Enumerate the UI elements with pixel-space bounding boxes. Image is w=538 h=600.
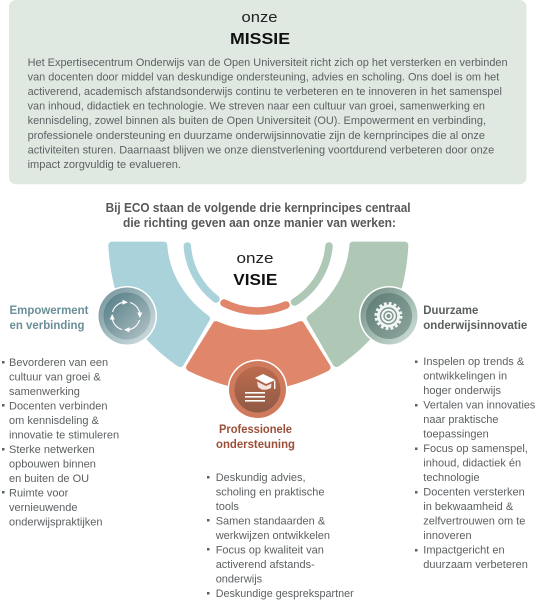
- list: empowerment: Bevorderen van een: [9, 357, 108, 369]
- heading: professionele: [216, 422, 295, 451]
- heading: onze missie: onze: [242, 10, 278, 26]
- text block: missie: kennisdeling, zowel binnen als buiten de Open Universiteit (OU). Empowerment en verbinding,: [28, 115, 486, 127]
- list: professionele: Deskundig advies,: [216, 472, 306, 484]
- list: duurzame: zelfvertrouwen om te: [423, 516, 525, 528]
- list: duurzame: innoveren: [423, 530, 472, 542]
- list: duurzame: Inspelen op trends &: [423, 356, 525, 368]
- icon: empowerment circular arrows: [97, 286, 157, 346]
- list: duurzame: duurzaam verbeteren: [423, 559, 528, 571]
- list: duurzame: inhoud, didactiek én: [423, 458, 521, 470]
- segment: green: [307, 242, 408, 367]
- list: empowerment: cultuur van groei &: [9, 372, 101, 384]
- list: duurzame: technologie: [423, 472, 480, 484]
- text block: missie: van docenten door middel van deskundige ondersteuning, advies en scholing. Ons doel is om het: [28, 72, 499, 84]
- heading: empowerment: en verbinding: [10, 318, 84, 332]
- panel: missie: [9, 0, 526, 184]
- diagram: visie segments: [108, 242, 408, 391]
- list: empowerment: opbouwen binnen: [9, 458, 96, 470]
- arc: coral thin: [224, 303, 286, 311]
- list: duurzame: naar praktische: [423, 414, 499, 426]
- list: empowerment: innovatie te stimuleren: [9, 430, 119, 442]
- list: empowerment: en buiten de OU: [9, 473, 89, 485]
- intro heading: die richting geven aan onze manier van werken:: [123, 216, 396, 230]
- list: empowerment: Docenten verbinden: [9, 400, 107, 412]
- heading: onze visie: VISIE: [233, 272, 278, 289]
- list: professionele: Focus op kwaliteit van: [216, 544, 324, 556]
- icon: duurzame gear: [359, 286, 419, 346]
- heading: professionele: ondersteuning: [216, 437, 295, 451]
- list: empowerment: [2, 357, 119, 528]
- list: empowerment: onderwijspraktijken: [9, 516, 103, 528]
- list: empowerment: Ruimte voor: [9, 488, 69, 500]
- list: professionele: tools: [216, 501, 239, 513]
- list: empowerment: samenwerking: [9, 386, 80, 398]
- text block: missie: activiteiten sturen. Daarnaast blijven we onze dienstverlening voortdurend verbeteren door onze: [28, 144, 494, 156]
- list: professionele: activerend afstands-: [216, 559, 315, 571]
- intro heading: Bij ECO staan de volgende drie kernprincipes centraal: [106, 201, 411, 215]
- list: duurzame: ontwikkelingen in: [423, 370, 507, 382]
- list: duurzame: Vertalen van innovaties: [423, 400, 536, 412]
- list: professionele: [207, 472, 354, 600]
- heading: duurzame: Duurzame: [423, 303, 479, 317]
- heading: empowerment: [10, 303, 88, 332]
- list: duurzame: in bekwaamheid &: [423, 501, 514, 513]
- list: duurzame: Impactgericht en: [423, 544, 505, 556]
- text block: missie: van inhoud, didactiek en technologie. We streven naar een cultuur van groei, samenwerking en: [28, 101, 485, 113]
- heading: duurzame: onderwijsinnovatie: [423, 318, 528, 332]
- list: duurzame: Focus op samenspel,: [423, 443, 528, 455]
- list: professionele: scholing en praktische: [216, 486, 325, 498]
- list: duurzame: toepassingen: [423, 428, 489, 440]
- segment: coral: [186, 321, 331, 391]
- list: empowerment: Sterke netwerken: [9, 444, 95, 456]
- list: duurzame: [415, 356, 536, 571]
- text block: missie: impact zorgvuldig te evalueren.: [28, 159, 181, 171]
- list: professionele: werkwijzen ontwikkelen: [215, 530, 330, 542]
- heading: onze visie: onze: [236, 251, 274, 267]
- list: duurzame: Docenten versterken: [423, 486, 525, 498]
- list: empowerment: vernieuwende: [9, 502, 78, 514]
- intro heading: [106, 201, 411, 230]
- heading: duurzame: [423, 303, 528, 332]
- heading: onze visie: [233, 251, 278, 289]
- text block: missie: professionele ondersteuning en duurzame onderwijsinnovatie zijn de kernprincipes die al onze: [28, 130, 485, 142]
- arc: green thin: [294, 246, 329, 302]
- segment: blue: [108, 242, 210, 367]
- heading: empowerment: Empowerment: [10, 303, 88, 317]
- list: professionele: Samen standaarden &: [216, 516, 326, 528]
- list: duurzame: hoger onderwijs: [423, 385, 501, 397]
- heading: onze missie: MISSIE: [230, 31, 290, 48]
- list: professionele: Deskundige gesprekspartner: [216, 588, 354, 600]
- list: professionele: onderwijs: [216, 574, 263, 586]
- text block: missie: activerend, academisch afstandsonderwijs continu te verbeteren en te innoveren in het samenspel: [28, 86, 502, 98]
- icon: professionele graduation cap: [228, 360, 288, 420]
- arc: blue thin: [187, 246, 216, 299]
- heading: professionele: Professionele: [219, 422, 292, 436]
- text block: missie: [28, 57, 508, 171]
- heading: onze missie: [230, 10, 290, 48]
- list: empowerment: om kennisdeling &: [9, 415, 100, 427]
- text block: missie: Het Expertisecentrum Onderwijs van de Open Universiteit richt zich op het versterken en verbinden: [28, 57, 508, 69]
